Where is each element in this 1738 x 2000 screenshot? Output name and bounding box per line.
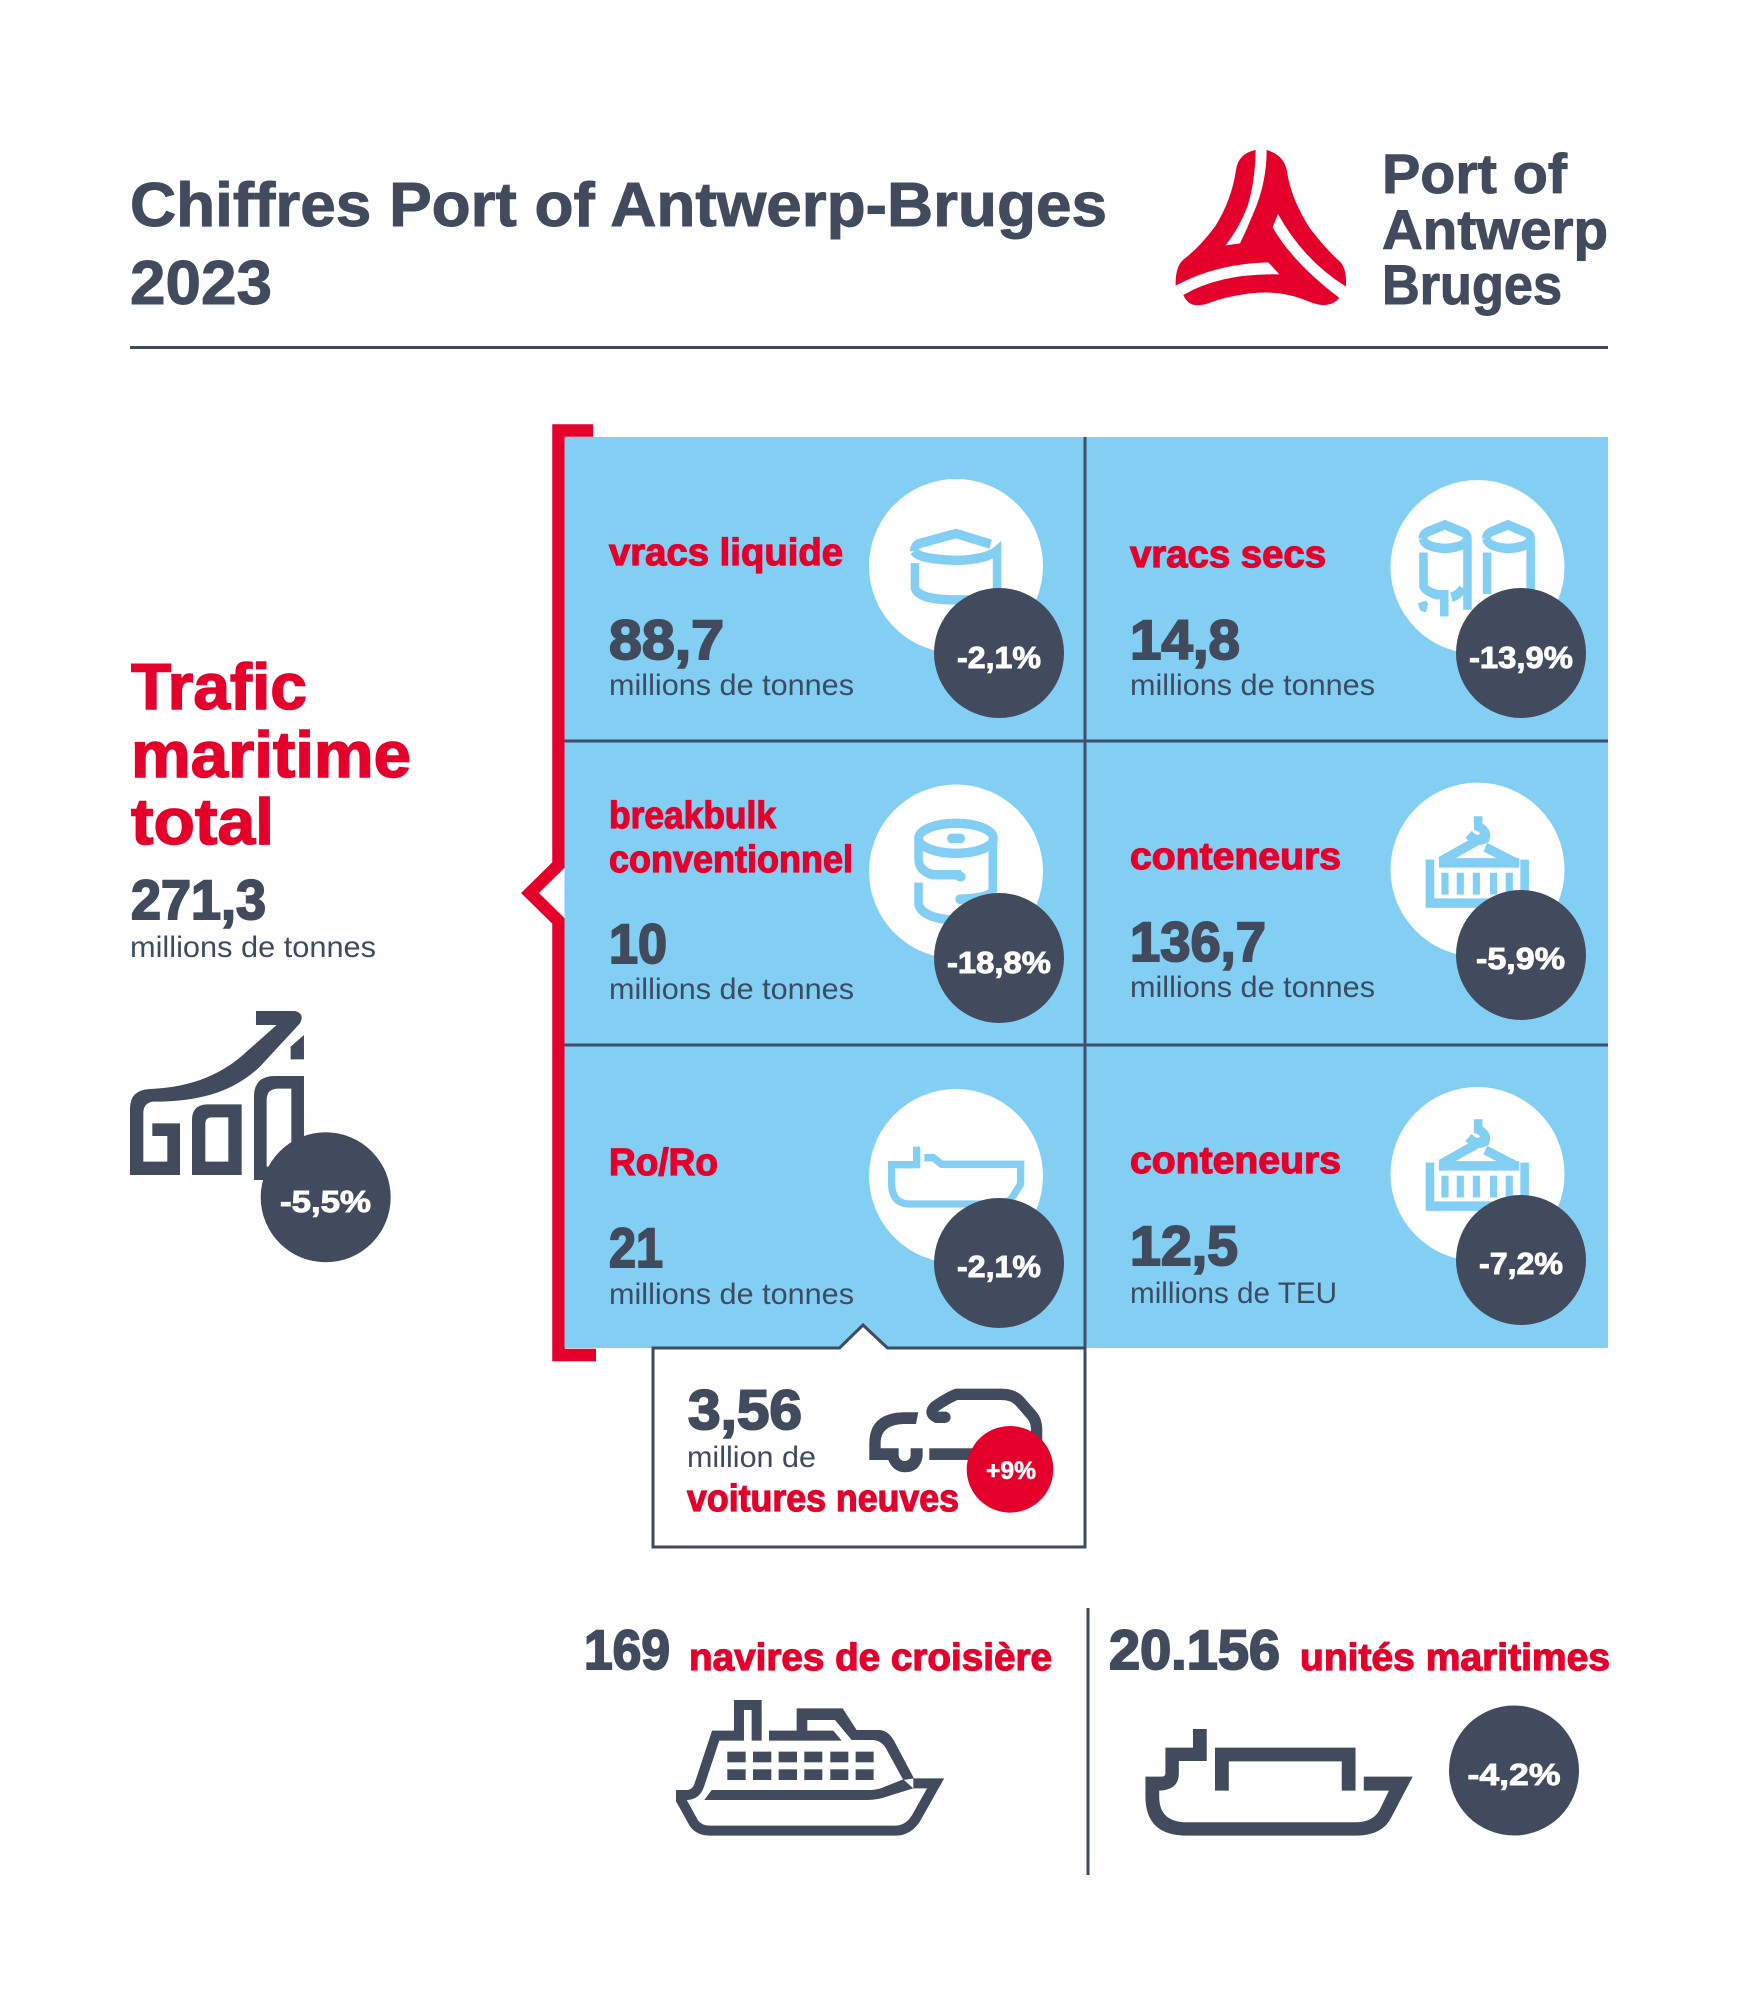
cell unit: millions de tonnes	[609, 1278, 854, 1311]
panel: ro/ro	[564, 1045, 1085, 1348]
figure: 169	[584, 1618, 670, 1681]
badge	[934, 893, 1064, 1023]
badge: -18,8%	[947, 945, 1051, 980]
logo wordmark: Port of	[1382, 142, 1567, 205]
icon circle	[1390, 783, 1564, 957]
badge	[934, 1198, 1064, 1328]
label: unités maritimes	[1300, 1637, 1610, 1679]
icon: silos	[1422, 525, 1531, 617]
cell unit: millions de TEU	[1130, 1277, 1337, 1310]
panel: conteneurs TEU	[1085, 1045, 1608, 1348]
logo wordmark	[1382, 142, 1608, 316]
cell unit: millions de tonnes	[609, 669, 854, 702]
label: navires de croisière	[689, 1637, 1052, 1679]
icon: car	[869, 1394, 1037, 1472]
panel: unités maritimes	[1109, 1618, 1610, 1836]
cell heading: conteneurs	[1130, 836, 1341, 878]
badge	[934, 588, 1064, 718]
bracket	[530, 430, 596, 1355]
logo symbol	[1176, 150, 1346, 305]
heading: trafic maritime total: Trafic	[131, 650, 307, 723]
badge: -7,2%	[1479, 1246, 1563, 1281]
cell heading: Ro/Ro	[609, 1142, 718, 1184]
badge: -5,9%	[1476, 941, 1565, 976]
total figure	[130, 868, 376, 964]
cell unit: millions de tonnes	[1130, 971, 1375, 1004]
badge: -4,2%	[1449, 1706, 1579, 1836]
badge: -5,5%: -5,5%	[280, 1184, 371, 1219]
cell heading: breakbulk	[609, 795, 777, 837]
badge	[1456, 1195, 1586, 1325]
panel: vracs secs	[1085, 437, 1608, 741]
heading: trafic maritime total: maritime	[131, 718, 411, 791]
cell unit: millions de tonnes	[609, 973, 854, 1006]
heading: trafic maritime total	[131, 650, 411, 858]
panel: conteneurs tonnes	[1085, 741, 1608, 1045]
header	[130, 142, 1608, 318]
cell heading: vracs liquide	[609, 532, 843, 574]
cell figure: 10	[609, 912, 667, 975]
cell figure: 136,7	[1130, 910, 1266, 973]
badge: -5,5%	[261, 1132, 391, 1262]
icon: barge	[1145, 1729, 1413, 1836]
callout figure: 3,56	[688, 1378, 802, 1441]
logo wordmark: Bruges	[1382, 253, 1562, 316]
icon circle	[869, 479, 1043, 653]
icon: liquid tank	[914, 533, 997, 600]
icon circle	[1390, 1087, 1564, 1261]
badge: +9%	[967, 1426, 1053, 1513]
title: Chiffres Port of Antwerp-Bruges	[130, 171, 1107, 240]
cell figure: 21	[609, 1216, 663, 1279]
badge: +9%: +9%	[986, 1457, 1036, 1485]
title	[130, 171, 1107, 318]
icon circle	[1390, 480, 1564, 654]
panel: navires de croisière	[584, 1618, 1052, 1831]
icon: cruise ship	[681, 1705, 936, 1831]
panel: breakbulk conventionnel	[564, 741, 1085, 1045]
badge	[1456, 890, 1586, 1020]
cell figure: 12,5	[1130, 1214, 1238, 1277]
badge: -4,2%: -4,2%	[1468, 1757, 1560, 1792]
icon: container on hook	[1430, 816, 1525, 903]
cell figure: 88,7	[609, 608, 724, 671]
panel: vracs liquide	[564, 437, 1085, 741]
cell heading: vracs secs	[1130, 534, 1326, 576]
icon: steel coil	[919, 823, 994, 920]
badge	[1456, 588, 1586, 718]
callout label: voitures neuves	[687, 1478, 959, 1520]
callout: voitures neuves	[653, 1325, 1085, 1547]
cell heading	[609, 795, 853, 881]
panel: total maritime traffic	[130, 650, 411, 1262]
badge: -2,1%	[957, 1249, 1041, 1284]
callout unit: million de	[687, 1441, 816, 1474]
cell figure: 14,8	[1130, 608, 1240, 671]
cell heading: conventionnel	[609, 839, 853, 881]
icon: growth chart	[130, 1011, 304, 1180]
icon circle	[869, 1089, 1043, 1263]
figure: 20.156	[1109, 1618, 1280, 1681]
cell heading: conteneurs	[1130, 1140, 1341, 1182]
total figure: 271,3	[131, 868, 266, 931]
badge: -2,1%	[957, 640, 1041, 675]
icon: container on hook	[1430, 1119, 1525, 1206]
icon circle	[869, 784, 1043, 958]
icon: ro/ro ship	[892, 1147, 1021, 1204]
badge: -13,9%	[1469, 640, 1573, 675]
cell unit: millions de tonnes	[1130, 669, 1375, 702]
title: 2023	[130, 249, 272, 318]
total figure: millions de tonnes	[130, 931, 376, 964]
heading: trafic maritime total: total	[131, 785, 274, 858]
logo wordmark: Antwerp	[1382, 198, 1608, 261]
